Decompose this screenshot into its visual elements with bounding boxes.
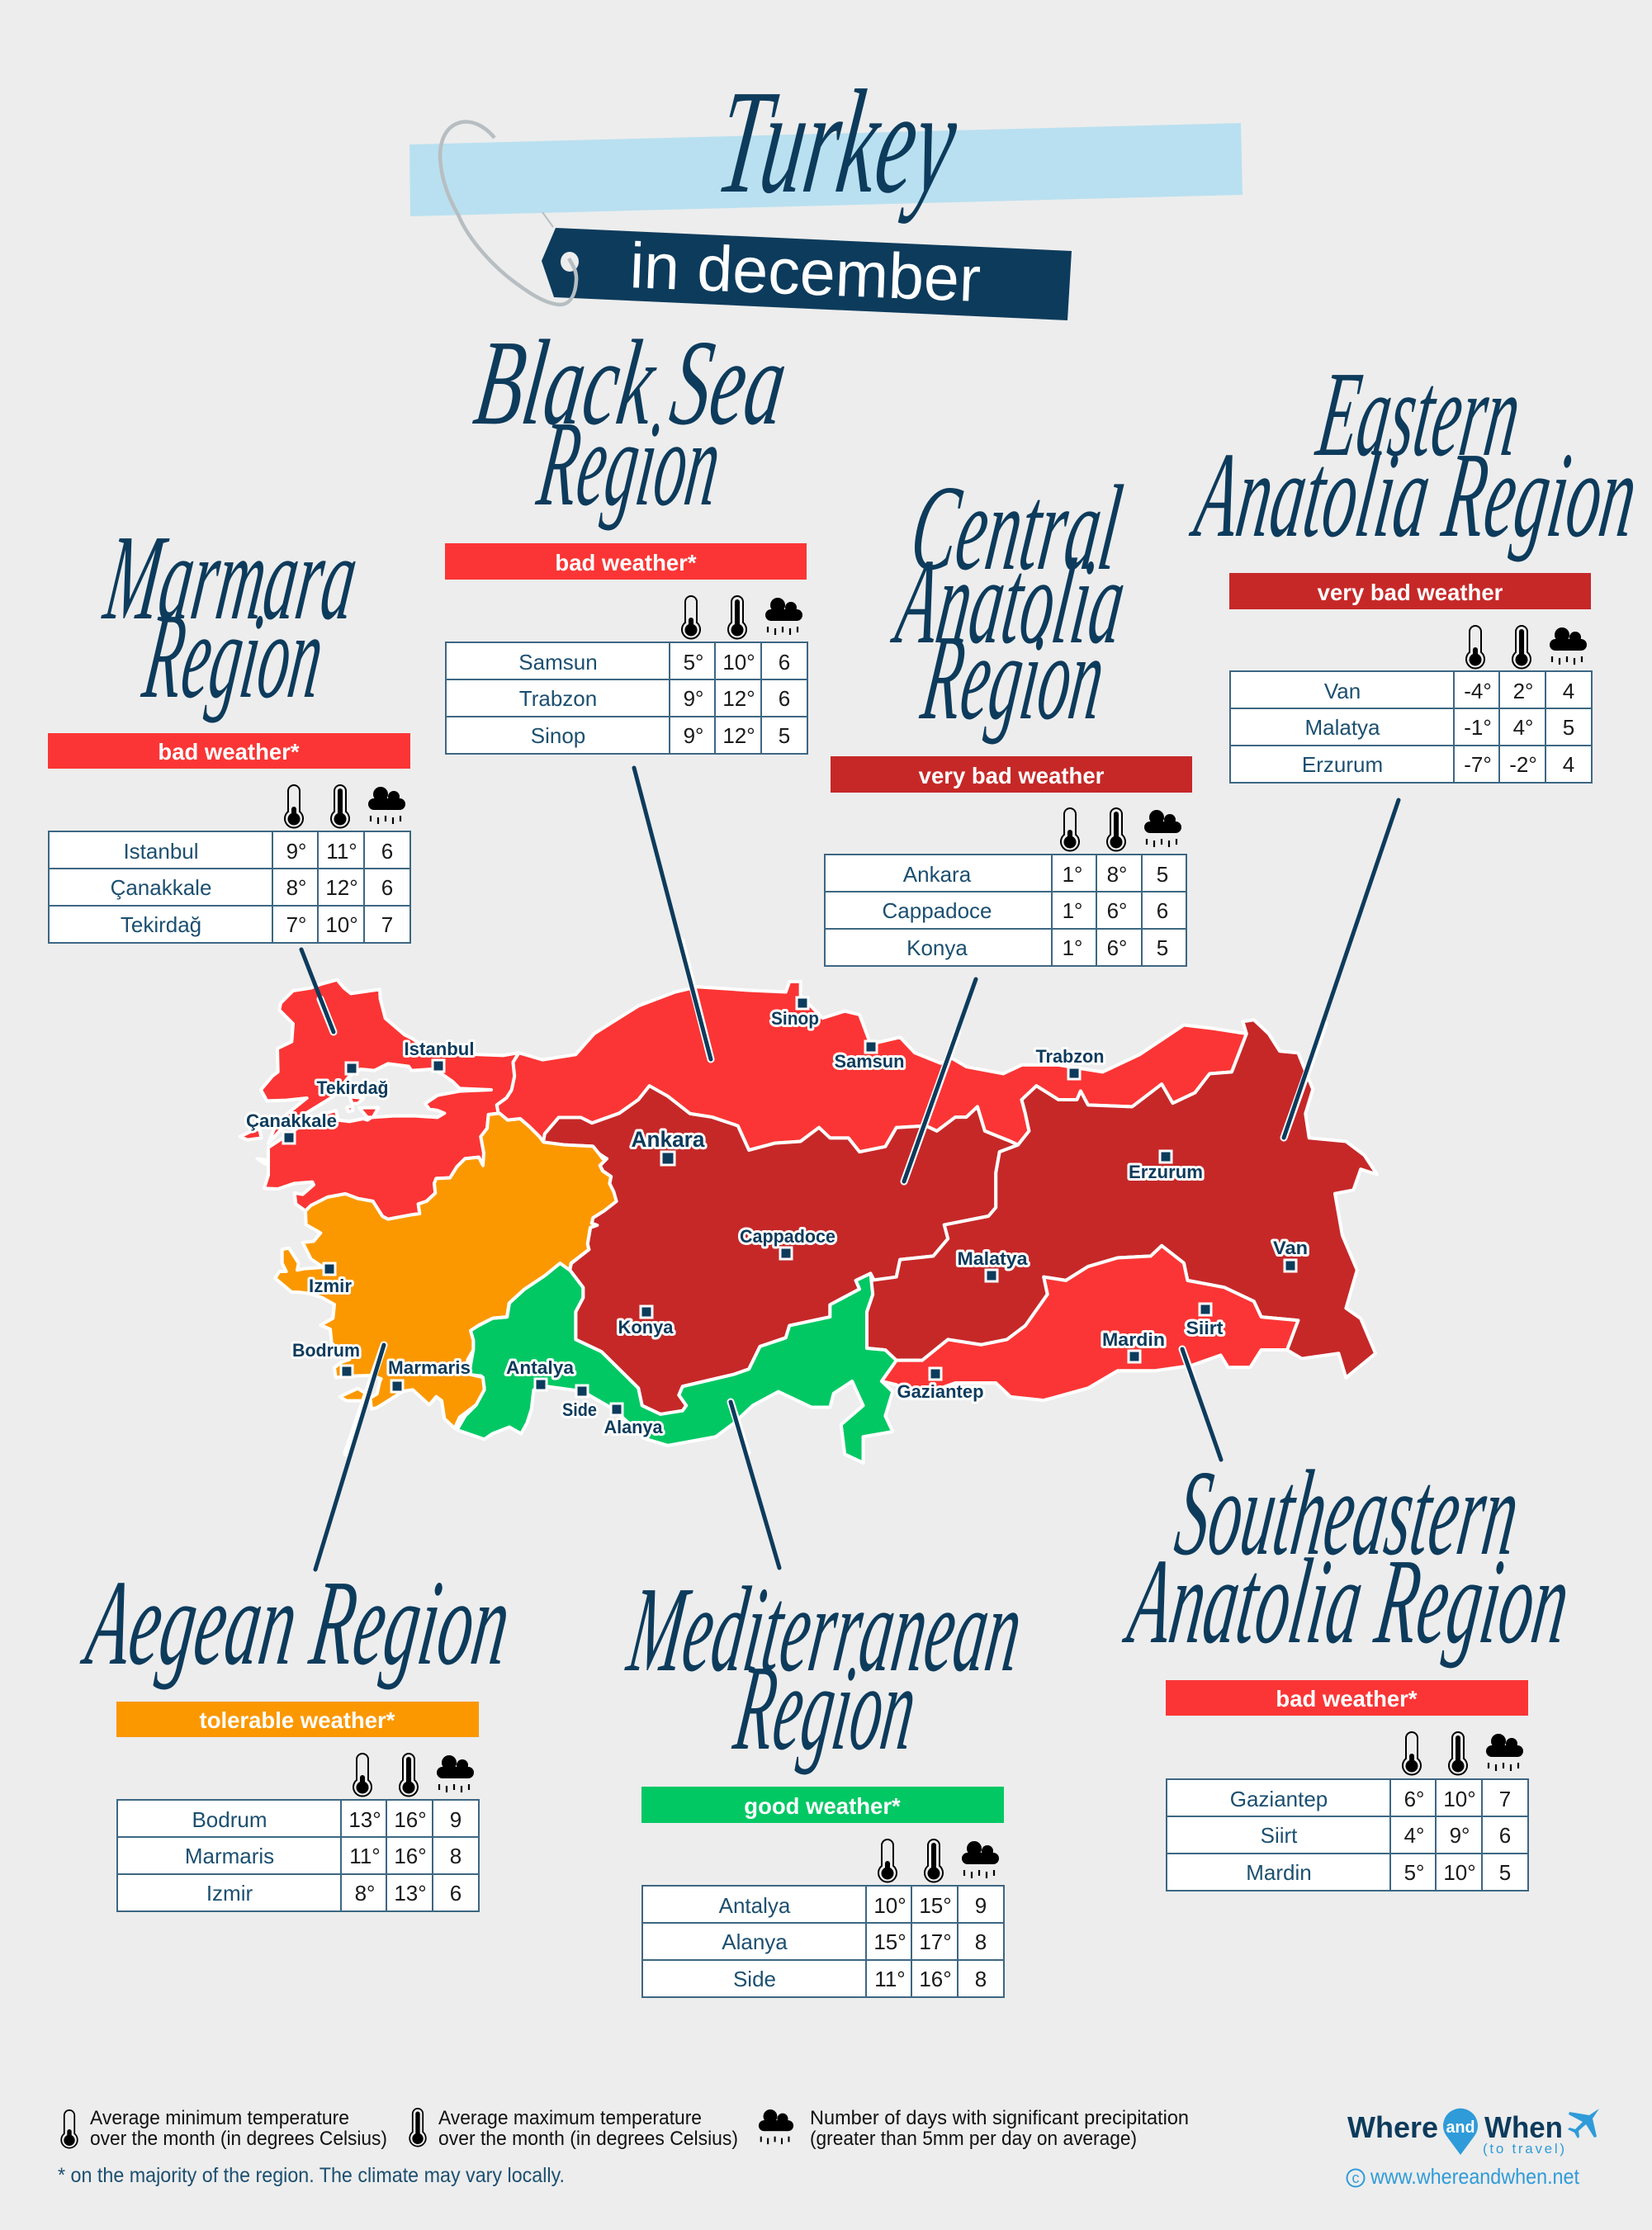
climate table [1230,671,1592,783]
callout line: Central Anatolia [904,979,976,1181]
city labels: Samsun [834,1051,905,1072]
logo word: When: When [1484,2110,1563,2144]
weather bar [641,1787,1004,1823]
city labels: Bodrum [292,1340,360,1361]
tag hole [561,252,579,272]
climate table: 13° [348,1807,381,1832]
climate table: 8° [286,875,306,900]
panel: Southeastern Anatolia Region [1117,1446,1577,1891]
city labels: Alanya [604,1417,663,1437]
climate table: 7° [286,912,306,937]
climate table: -4° [1464,679,1492,703]
city labels: Mardin [1102,1329,1165,1350]
climate table: 5 [779,723,790,748]
climate table: 1° [1063,935,1082,960]
subtitle: in december: in december [628,229,982,315]
callout line: Black Sea [634,768,711,1059]
climate table: 12° [722,686,755,711]
heading: Southeastern Anatolia Region [1117,1446,1577,1669]
city labels: Ankara [631,1127,705,1152]
light blue band [409,123,1243,216]
climate table: 6 [779,650,790,675]
climate table [117,1800,479,1911]
legend: precipitation: (greater than 5mm per day on average) [810,2128,1137,2150]
climate table: 5° [1404,1860,1424,1885]
navy luggage tag [542,228,1072,320]
city labels: Istanbul [405,1039,474,1059]
climate table [446,642,807,754]
climate table: 7 [1499,1787,1511,1811]
heading: Central Anatolia Region: Central [903,461,1129,596]
map region: Black Sea [497,982,1247,1152]
climate table: 6 [381,875,393,900]
climate table: 9° [684,686,703,711]
climate table: 5 [1563,715,1574,740]
climate table: Tekirdağ [121,912,201,937]
city labels: Konya [618,1317,674,1338]
heading: Aegean Region: Aegean Region [75,1555,518,1691]
city labels: Antalya [506,1357,575,1378]
climate table: 4° [1404,1823,1424,1848]
heading: Black Sea Region [467,315,794,532]
legend: minimum temperature: over the month (in degrees Celsius) [90,2128,387,2150]
heading: Mediterranean Region: Mediterranean [620,1562,1030,1697]
climate table: Trabzon [519,686,597,711]
weather bar: very bad weather [919,763,1105,788]
callout line: Eastern Anatolia [1284,800,1399,1138]
weather bar [116,1702,479,1737]
climate table: 10° [325,912,358,937]
legend: minimum temperature: Average minimum temperature [90,2107,349,2129]
climate table: 11° [349,1844,381,1868]
legend: minimum temperature [61,2107,387,2150]
callout line: Southeastern Anatolia [1182,1349,1221,1460]
weather bar: tolerable weather* [200,1707,395,1733]
icons [1466,626,1587,668]
tag string loop [440,122,576,305]
climate table: 15° [873,1929,906,1954]
climate table: Side [733,1967,776,1991]
website url: www.whereandwhen.net [1370,2164,1580,2189]
climate table: 11° [326,839,357,864]
climate table: 9° [684,723,703,748]
weather bar [831,756,1192,793]
logo word: Where: Where [1347,2110,1438,2144]
panel: Eastern Anatolia Region [1184,347,1645,783]
weather bar: bad weather* [158,739,300,765]
panel: Mediterranean Region [620,1562,1030,1997]
climate table: 6 [1499,1823,1511,1848]
climate table: 4 [1563,752,1574,777]
climate table: 6° [1107,898,1127,923]
climate table: 16° [394,1844,427,1868]
climate table: Antalya [719,1893,791,1918]
climate table [1167,1779,1528,1891]
climate table: Bodrum [192,1807,267,1832]
city labels: Trabzon [1035,1046,1105,1067]
climate table: Alanya [722,1929,788,1954]
weather bar [1166,1680,1528,1716]
city labels [246,1008,1308,1437]
logo pin [1443,2109,1478,2155]
climate table: 10° [1443,1787,1476,1811]
legend: precipitation: Number of days with significant precipitation [810,2107,1189,2129]
climate table: 9° [286,839,306,864]
climate table: -7° [1464,752,1492,777]
climate table: 9 [975,1893,987,1918]
climate table: 6 [779,686,790,711]
weather bar: very bad weather [1318,580,1503,605]
climate table: 12° [325,875,358,900]
climate table: 5 [1157,935,1168,960]
city labels: Side [562,1399,597,1420]
title: Turkey: Turkey [708,60,967,225]
climate table: 6° [1107,935,1127,960]
weather bar: bad weather* [1276,1686,1418,1712]
panel: Marmara Region [48,510,410,943]
map region: Central Anatolia [543,1086,1018,1414]
climate table: 10° [873,1893,906,1918]
map region: Southeastern Anatolia [882,1246,1298,1400]
icons [1061,808,1181,850]
icons [878,1839,999,1882]
climate table: 6 [381,839,393,864]
logo: Where and When to travel [1347,2109,1599,2189]
map of Turkey [240,768,1399,1570]
callout line: Aegean [315,1345,384,1570]
climate table [825,855,1186,966]
footnote: * on the majority of the region. The climate may vary locally. [58,2164,565,2187]
heading: Marmara Region: Region [136,589,331,724]
climate table: 13° [394,1881,427,1906]
climate table: 17° [919,1929,952,1954]
logo tagline: (to travel) [1483,2141,1564,2157]
climate table: 2° [1513,679,1533,703]
climate table: 6 [1157,898,1168,923]
climate table: Ankara [903,862,972,887]
panel: Black Sea Region [445,315,807,754]
climate table: Izmir [206,1881,253,1906]
title banner [409,60,1243,320]
climate table [642,1886,1004,1997]
climate table: 6° [1404,1787,1424,1811]
heading: Eastern Anatolia Region [1184,347,1645,563]
climate table: 9 [450,1807,462,1832]
climate table: 8° [1107,862,1127,887]
climate table: 1° [1063,862,1082,887]
climate table: 10° [722,650,755,675]
legend: precipitation [759,2107,1189,2150]
climate table: Marmaris [185,1844,274,1868]
legend [58,2107,1189,2187]
climate table: -2° [1509,752,1537,777]
climate table: 9° [1450,1823,1470,1848]
heading: Marmara Region: Marmara [97,510,365,646]
city labels: Gaziantep [897,1381,984,1402]
climate table: Mardin [1246,1860,1312,1885]
heading: Central Anatolia Region: Anatolia [886,534,1133,670]
legend: maximum temperature: over the month (in degrees Celsius) [438,2128,738,2150]
map region: Marmara [240,980,518,1219]
climate table [49,831,410,943]
icons [682,596,802,638]
climate table: 10° [1443,1860,1476,1885]
map region: Eastern Anatolia [867,1020,1377,1378]
climate table: Gaziantep [1230,1787,1328,1811]
climate table: -1° [1464,715,1492,740]
climate table: 5 [1499,1860,1511,1885]
city labels: Sinop [771,1008,819,1029]
weather bar [48,733,410,769]
icons [353,1754,474,1796]
climate table: 6 [450,1881,462,1906]
climate table: Sinop [531,723,585,748]
climate table: Istanbul [123,839,199,864]
heading: Mediterranean Region: Region [727,1641,924,1776]
callout line: Marmara [301,949,334,1032]
climate table: 7 [381,912,393,937]
weather bar [445,543,807,580]
map region: Aegean [275,1113,617,1428]
panel: Aegean Region [75,1555,518,1911]
climate table: 4° [1513,715,1533,740]
weather bar: bad weather* [555,550,697,575]
climate table: 8 [450,1844,462,1868]
climate table: Erzurum [1302,752,1383,777]
map region: Mediterranean [457,1263,897,1463]
climate table: 4 [1563,679,1574,703]
city labels: Çanakkale [246,1110,337,1131]
climate table: 15° [919,1893,952,1918]
logo word: and: and [1446,2119,1474,2137]
icons [1403,1732,1523,1774]
logo icon: plane [1568,2109,1599,2138]
weather bar: good weather* [744,1793,901,1819]
climate table: Samsun [518,650,598,675]
heading: Mediterranean Region [620,1562,1030,1776]
callout line: Mediterranean [731,1402,779,1568]
icons [285,785,405,827]
city labels: Cappadoce [740,1226,835,1247]
weather bar [1229,573,1591,609]
copyright mark [1347,2170,1364,2186]
climate table: 1° [1063,898,1082,923]
heading: Central Anatolia Region: Region [915,610,1112,746]
legend: maximum temperature: Average maximum temperature [438,2107,702,2129]
copyright mark: c [1352,2170,1359,2186]
climate table: 8° [355,1881,375,1906]
panel: Central Anatolia Region [825,461,1192,966]
climate table: 11° [874,1967,906,1991]
climate table: 8 [975,1967,987,1991]
legend: maximum temperature [409,2107,738,2150]
climate table: 8 [975,1929,987,1954]
climate table: Siirt [1261,1823,1298,1848]
climate table: Malatya [1304,715,1380,740]
climate table: Van [1324,679,1361,703]
climate table: Cappadoce [882,898,992,923]
climate table: Çanakkale [111,875,211,900]
heading: Black Sea Region: Black Sea [467,315,794,451]
climate table: 16° [394,1807,427,1832]
heading: Central Anatolia Region [886,461,1133,746]
city labels: Erzurum [1129,1162,1203,1182]
city labels: Tekirdağ [317,1077,388,1098]
climate table: 5 [1157,862,1168,887]
climate table: 5° [684,650,703,675]
city markers [283,997,1296,1415]
climate table: 12° [722,723,755,748]
city labels: Malatya [958,1248,1028,1269]
city labels: Van [1273,1238,1308,1258]
climate table: Konya [906,935,968,960]
city labels: Siirt [1186,1318,1224,1338]
heading: Marmara Region [97,510,365,724]
city labels: Izmir [309,1276,352,1296]
climate table: 16° [919,1967,952,1991]
city labels: Marmaris [388,1357,471,1378]
heading: Black Sea Region: Region [531,396,728,532]
